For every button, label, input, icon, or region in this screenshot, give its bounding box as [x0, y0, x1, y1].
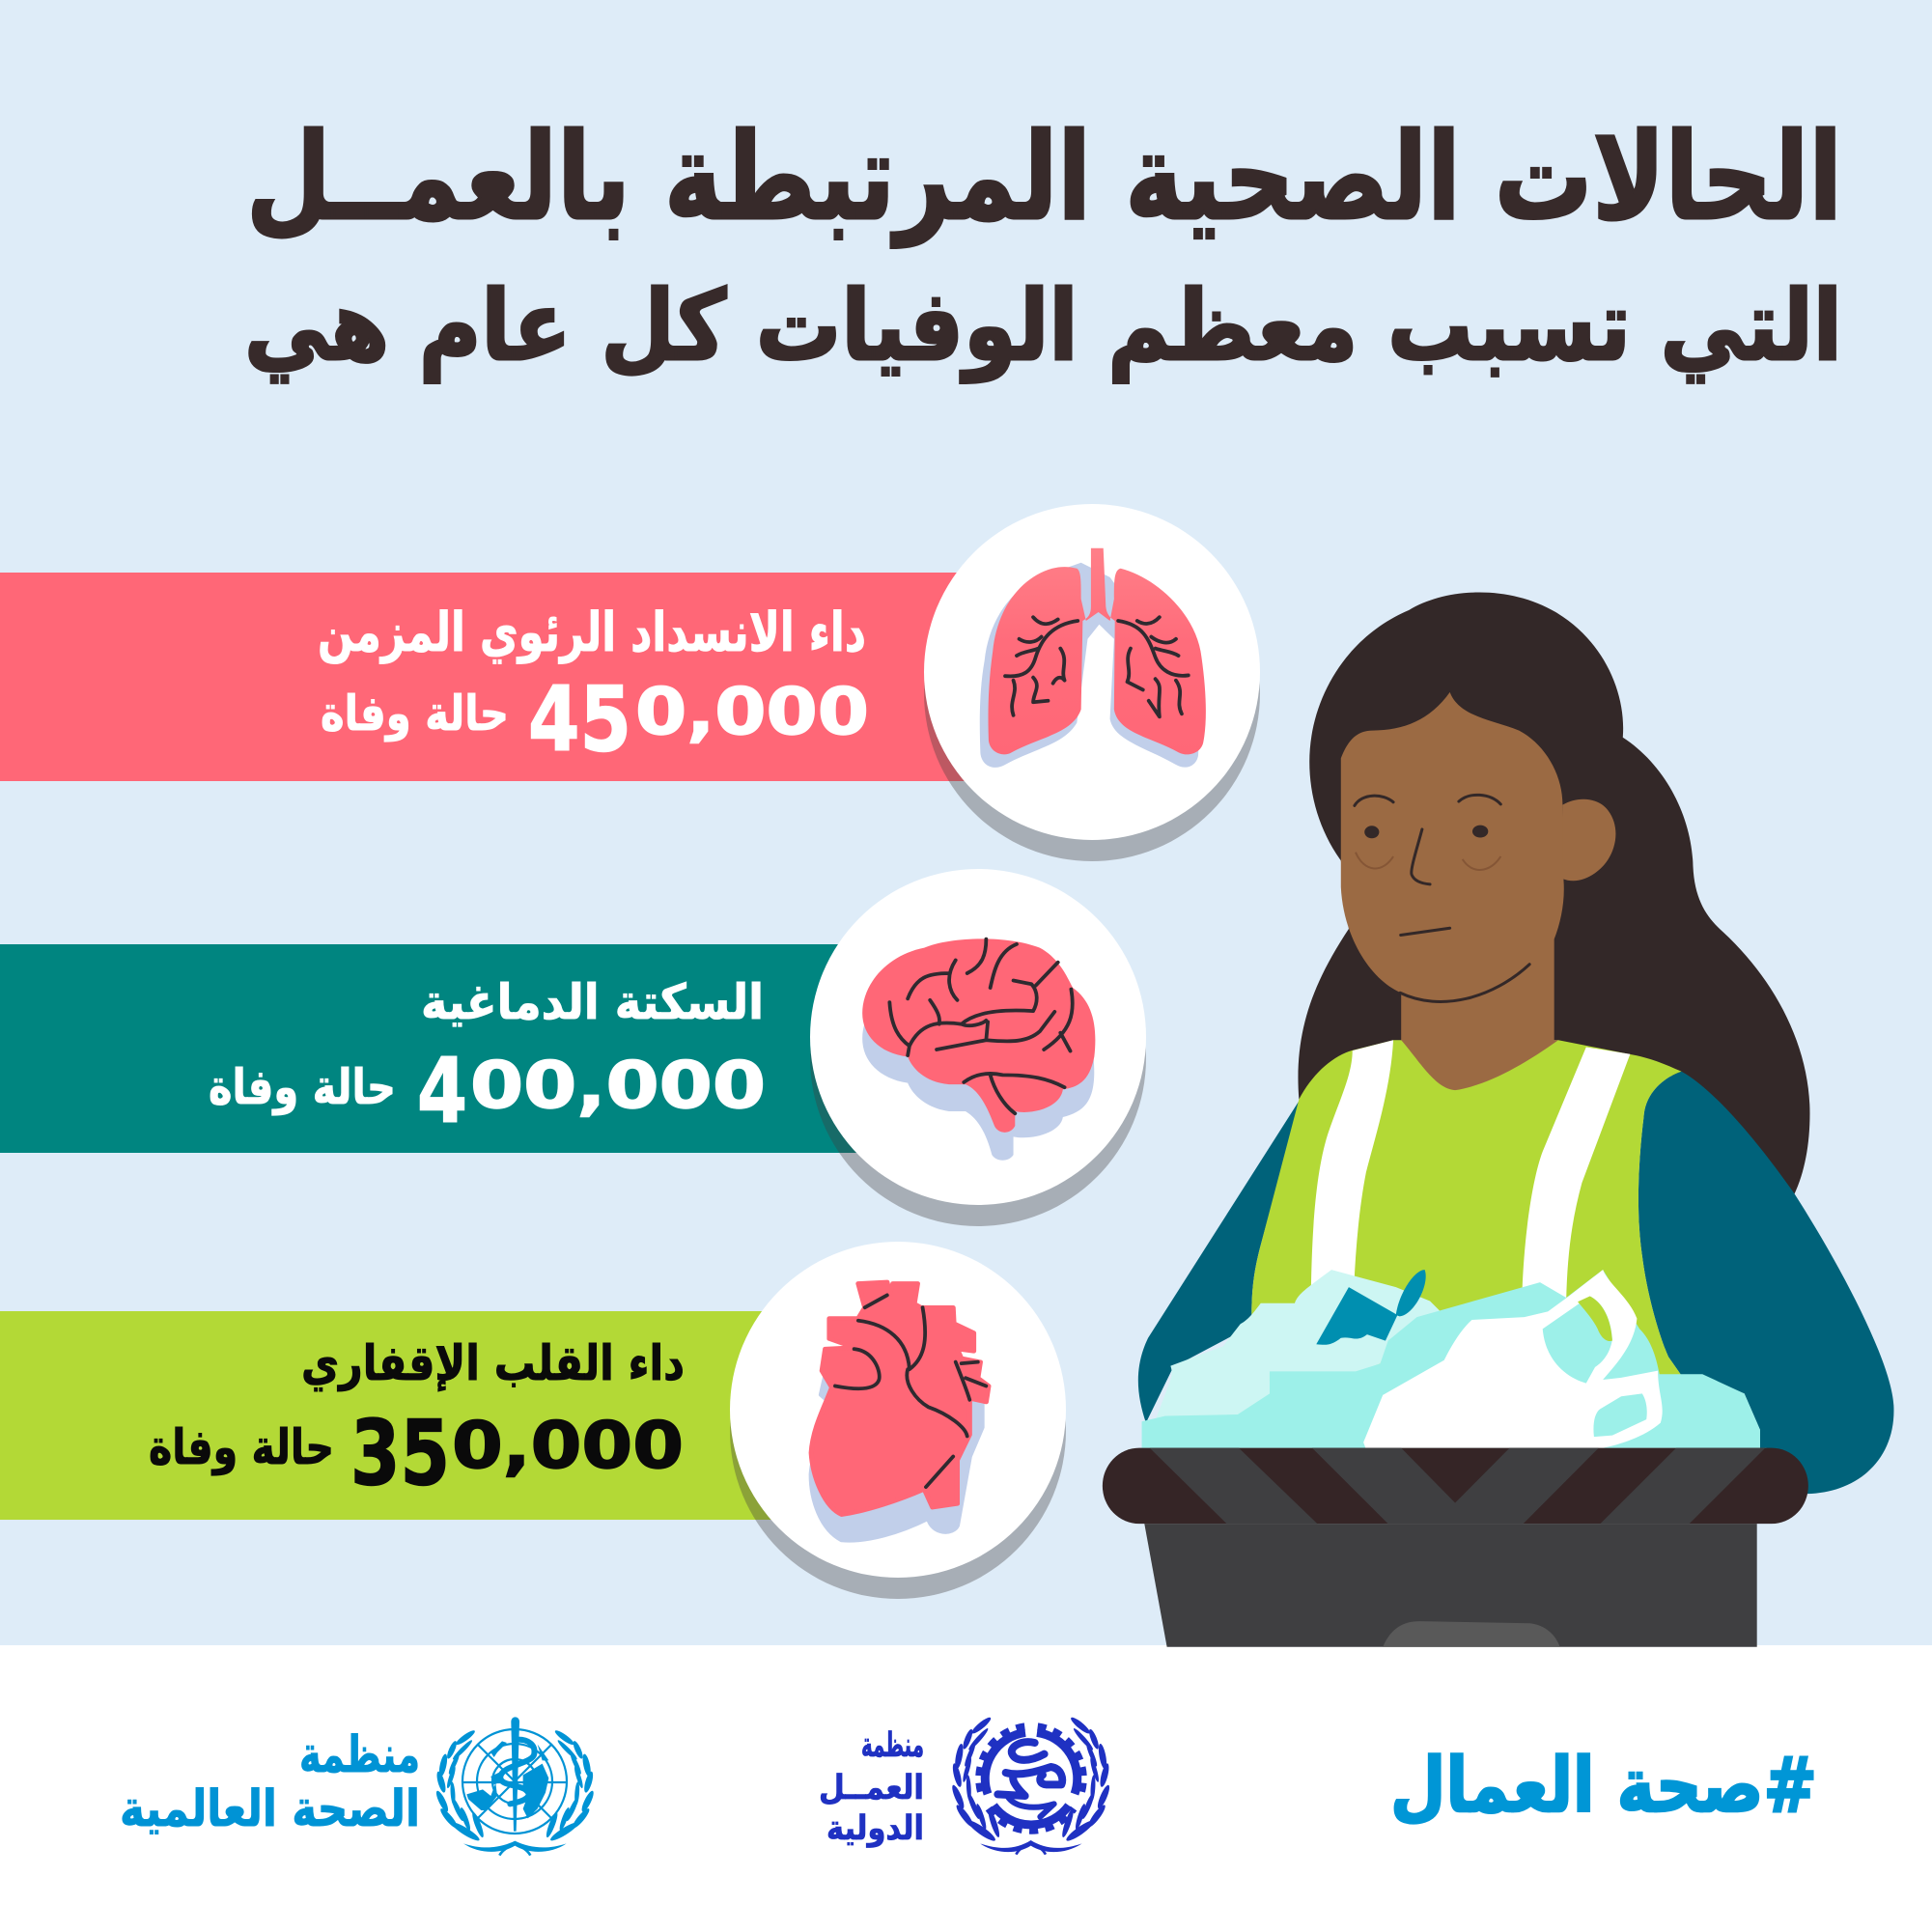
WHO continents — [466, 1741, 548, 1818]
bin lid — [1103, 1448, 1808, 1524]
heart disease number: 0,000 — [452, 1408, 684, 1483]
WHO globe — [462, 1729, 567, 1834]
neck and face — [1341, 692, 1564, 1090]
face details — [1355, 795, 1529, 1001]
WHO name — [120, 1726, 420, 1838]
rubbish: aqua bag — [1142, 1270, 1760, 1448]
WHO staff — [511, 1717, 519, 1832]
ear — [1562, 799, 1615, 881]
heart disease label: داء القلب الإقفاري — [301, 1335, 685, 1391]
hashtag: #صحة العمال — [1390, 1743, 1817, 1830]
ILO name: الدولية — [826, 1809, 924, 1848]
circle shadow — [810, 890, 1146, 1226]
ILO name: العمــل — [819, 1769, 924, 1807]
reflective stripes — [1311, 1040, 1630, 1302]
illustration: waste worker with bin — [1103, 593, 1893, 1647]
carton — [1316, 1287, 1397, 1345]
hair — [1298, 593, 1810, 1194]
circle shadow — [730, 1263, 1066, 1599]
panel: ischemic heart disease row — [0, 1242, 1066, 1599]
circle — [730, 1242, 1066, 1578]
right sleeve — [1638, 1072, 1893, 1494]
left sleeve — [1138, 1100, 1300, 1423]
WHO serpent — [500, 1740, 535, 1804]
COPD number: 0,000 — [635, 674, 869, 749]
footer panel — [0, 1645, 1932, 1932]
vest visible through bag handle — [1578, 1297, 1612, 1341]
stroke unit: حالة وفاة — [209, 1059, 396, 1116]
WHO name: منظمة — [299, 1726, 420, 1784]
title — [244, 108, 1842, 383]
WHO wreath — [434, 1728, 596, 1856]
stroke number: 4 — [417, 1039, 467, 1143]
circle — [810, 869, 1146, 1205]
ILO name: منظمة — [861, 1726, 924, 1765]
ILO wreath — [950, 1715, 1111, 1855]
COPD unit: حالة وفاة — [321, 686, 509, 742]
logo: International Labour Organization — [819, 1715, 1111, 1855]
circle — [924, 504, 1260, 840]
icon: brain — [862, 938, 1095, 1161]
carton spout — [1396, 1270, 1426, 1316]
icon: heart — [811, 1282, 989, 1540]
ILO emblem monogram — [997, 1742, 1062, 1817]
stroke label: السكتة الدماغية — [421, 974, 764, 1030]
heart disease unit: حالة وفاة — [149, 1419, 334, 1476]
logo: World Health Organization — [120, 1717, 596, 1856]
circle shadow — [924, 525, 1260, 861]
COPD number: 45 — [528, 667, 631, 771]
rubbish: white bag — [1363, 1270, 1663, 1448]
eyes — [1364, 826, 1379, 838]
ILO name — [819, 1726, 924, 1848]
heart disease number: 35 — [350, 1401, 450, 1505]
vest — [1251, 1040, 1682, 1381]
bin body — [1144, 1524, 1757, 1647]
panel: COPD row — [0, 504, 1260, 861]
bin handle — [1383, 1621, 1560, 1647]
bar: heart disease — [0, 1311, 898, 1520]
panel: stroke row — [0, 869, 1146, 1226]
WHO name: الصحة العالمية — [120, 1780, 420, 1838]
ILO gear — [979, 1726, 1083, 1831]
bar: COPD — [0, 573, 1092, 781]
COPD label: داء الانسداد الرئوي المزمن — [318, 602, 866, 664]
bin lid stripes — [1150, 1448, 1765, 1524]
rubbish: pale bag — [1155, 1270, 1441, 1421]
stroke number: 00,000 — [470, 1048, 766, 1123]
bar: stroke — [0, 944, 978, 1153]
icon: lungs — [980, 548, 1206, 768]
